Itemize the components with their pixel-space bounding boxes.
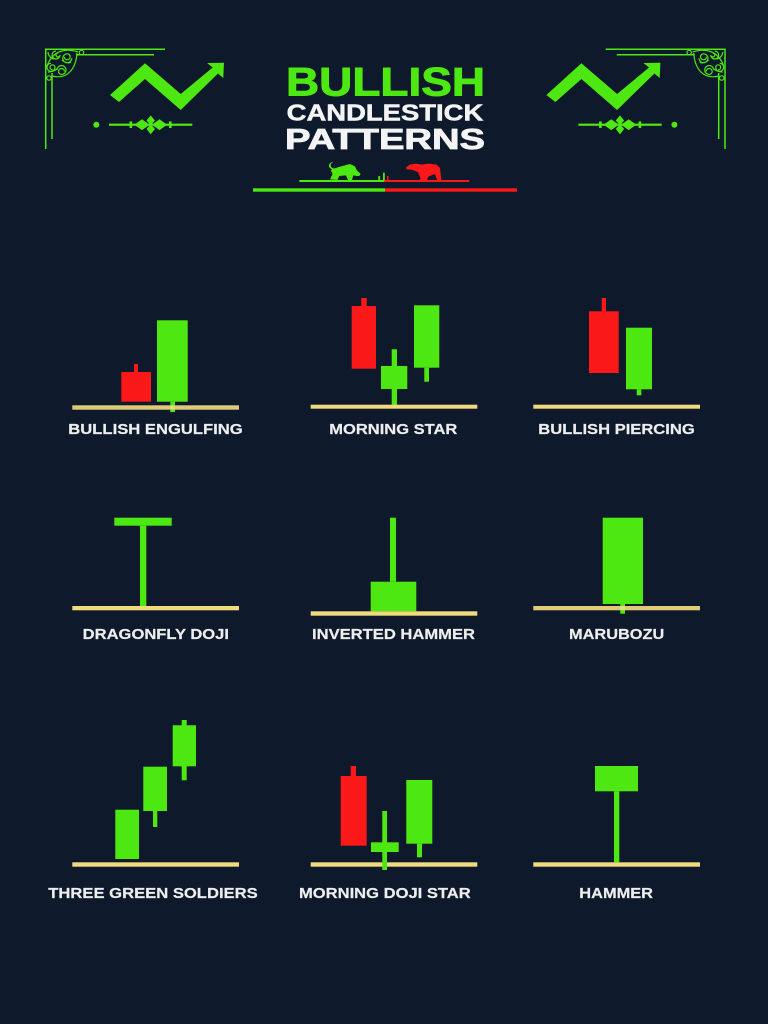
label: MARUBOZU bbox=[569, 627, 664, 643]
first candle bbox=[115, 810, 139, 859]
doji candle bbox=[371, 811, 399, 870]
icon: bull and bear emblem bbox=[299, 162, 469, 182]
label: BULLISH ENGULFING bbox=[68, 422, 243, 438]
red candle bbox=[352, 298, 376, 369]
tall green candle bbox=[414, 305, 439, 382]
label: INVERTED HAMMER bbox=[312, 627, 476, 643]
panel: three green soldiers bbox=[48, 720, 258, 902]
hammer candle bbox=[371, 518, 416, 611]
panel: hammer bbox=[533, 766, 700, 902]
baseline bbox=[311, 862, 477, 867]
baseline bbox=[72, 606, 239, 610]
panel: bullish piercing bbox=[533, 298, 700, 438]
title: PATTERNS bbox=[285, 124, 485, 156]
panel: bullish engulfing bbox=[68, 320, 243, 438]
label: DRAGONFLY DOJI bbox=[83, 627, 229, 643]
left corner frame bbox=[46, 49, 165, 149]
baseline bbox=[72, 405, 239, 410]
baseline bbox=[311, 611, 477, 616]
icon: right zigzag arrow bbox=[546, 63, 660, 110]
panel: dragonfly doji bbox=[72, 518, 239, 643]
panel: morning star bbox=[311, 298, 477, 438]
right corner frame bbox=[606, 49, 725, 149]
right ornament divider bbox=[578, 116, 677, 134]
header bbox=[46, 49, 725, 192]
title bbox=[285, 61, 485, 156]
panel: morning doji star bbox=[299, 766, 477, 902]
green candle bbox=[157, 320, 188, 412]
baseline bbox=[533, 405, 700, 409]
label: HAMMER bbox=[579, 886, 654, 902]
left ornament divider bbox=[93, 116, 192, 134]
panel: inverted hammer bbox=[311, 518, 477, 643]
marubozu candle bbox=[603, 518, 643, 614]
doji candle bbox=[114, 518, 172, 606]
hammer candle bbox=[595, 766, 638, 862]
third candle bbox=[173, 720, 196, 780]
label: THREE GREEN SOLDIERS bbox=[48, 886, 258, 902]
small green candle bbox=[381, 349, 407, 406]
red candle bbox=[589, 298, 619, 373]
baseline bbox=[533, 606, 700, 610]
second candle bbox=[143, 767, 167, 827]
baseline bbox=[533, 862, 700, 867]
baseline bbox=[311, 405, 477, 409]
label: MORNING STAR bbox=[329, 422, 458, 438]
label: MORNING DOJI STAR bbox=[299, 886, 471, 902]
panel: marubozu bbox=[533, 518, 700, 643]
green candle bbox=[626, 328, 652, 395]
red candle bbox=[121, 364, 151, 402]
red candle bbox=[341, 766, 367, 846]
green candle bbox=[406, 780, 432, 857]
baseline bbox=[72, 862, 239, 867]
red and green divider bar bbox=[253, 188, 517, 192]
title: CANDLESTICK bbox=[287, 99, 483, 125]
label: BULLISH PIERCING bbox=[538, 422, 695, 438]
title: BULLISH bbox=[286, 61, 485, 105]
icon: left zigzag arrow bbox=[110, 63, 224, 110]
